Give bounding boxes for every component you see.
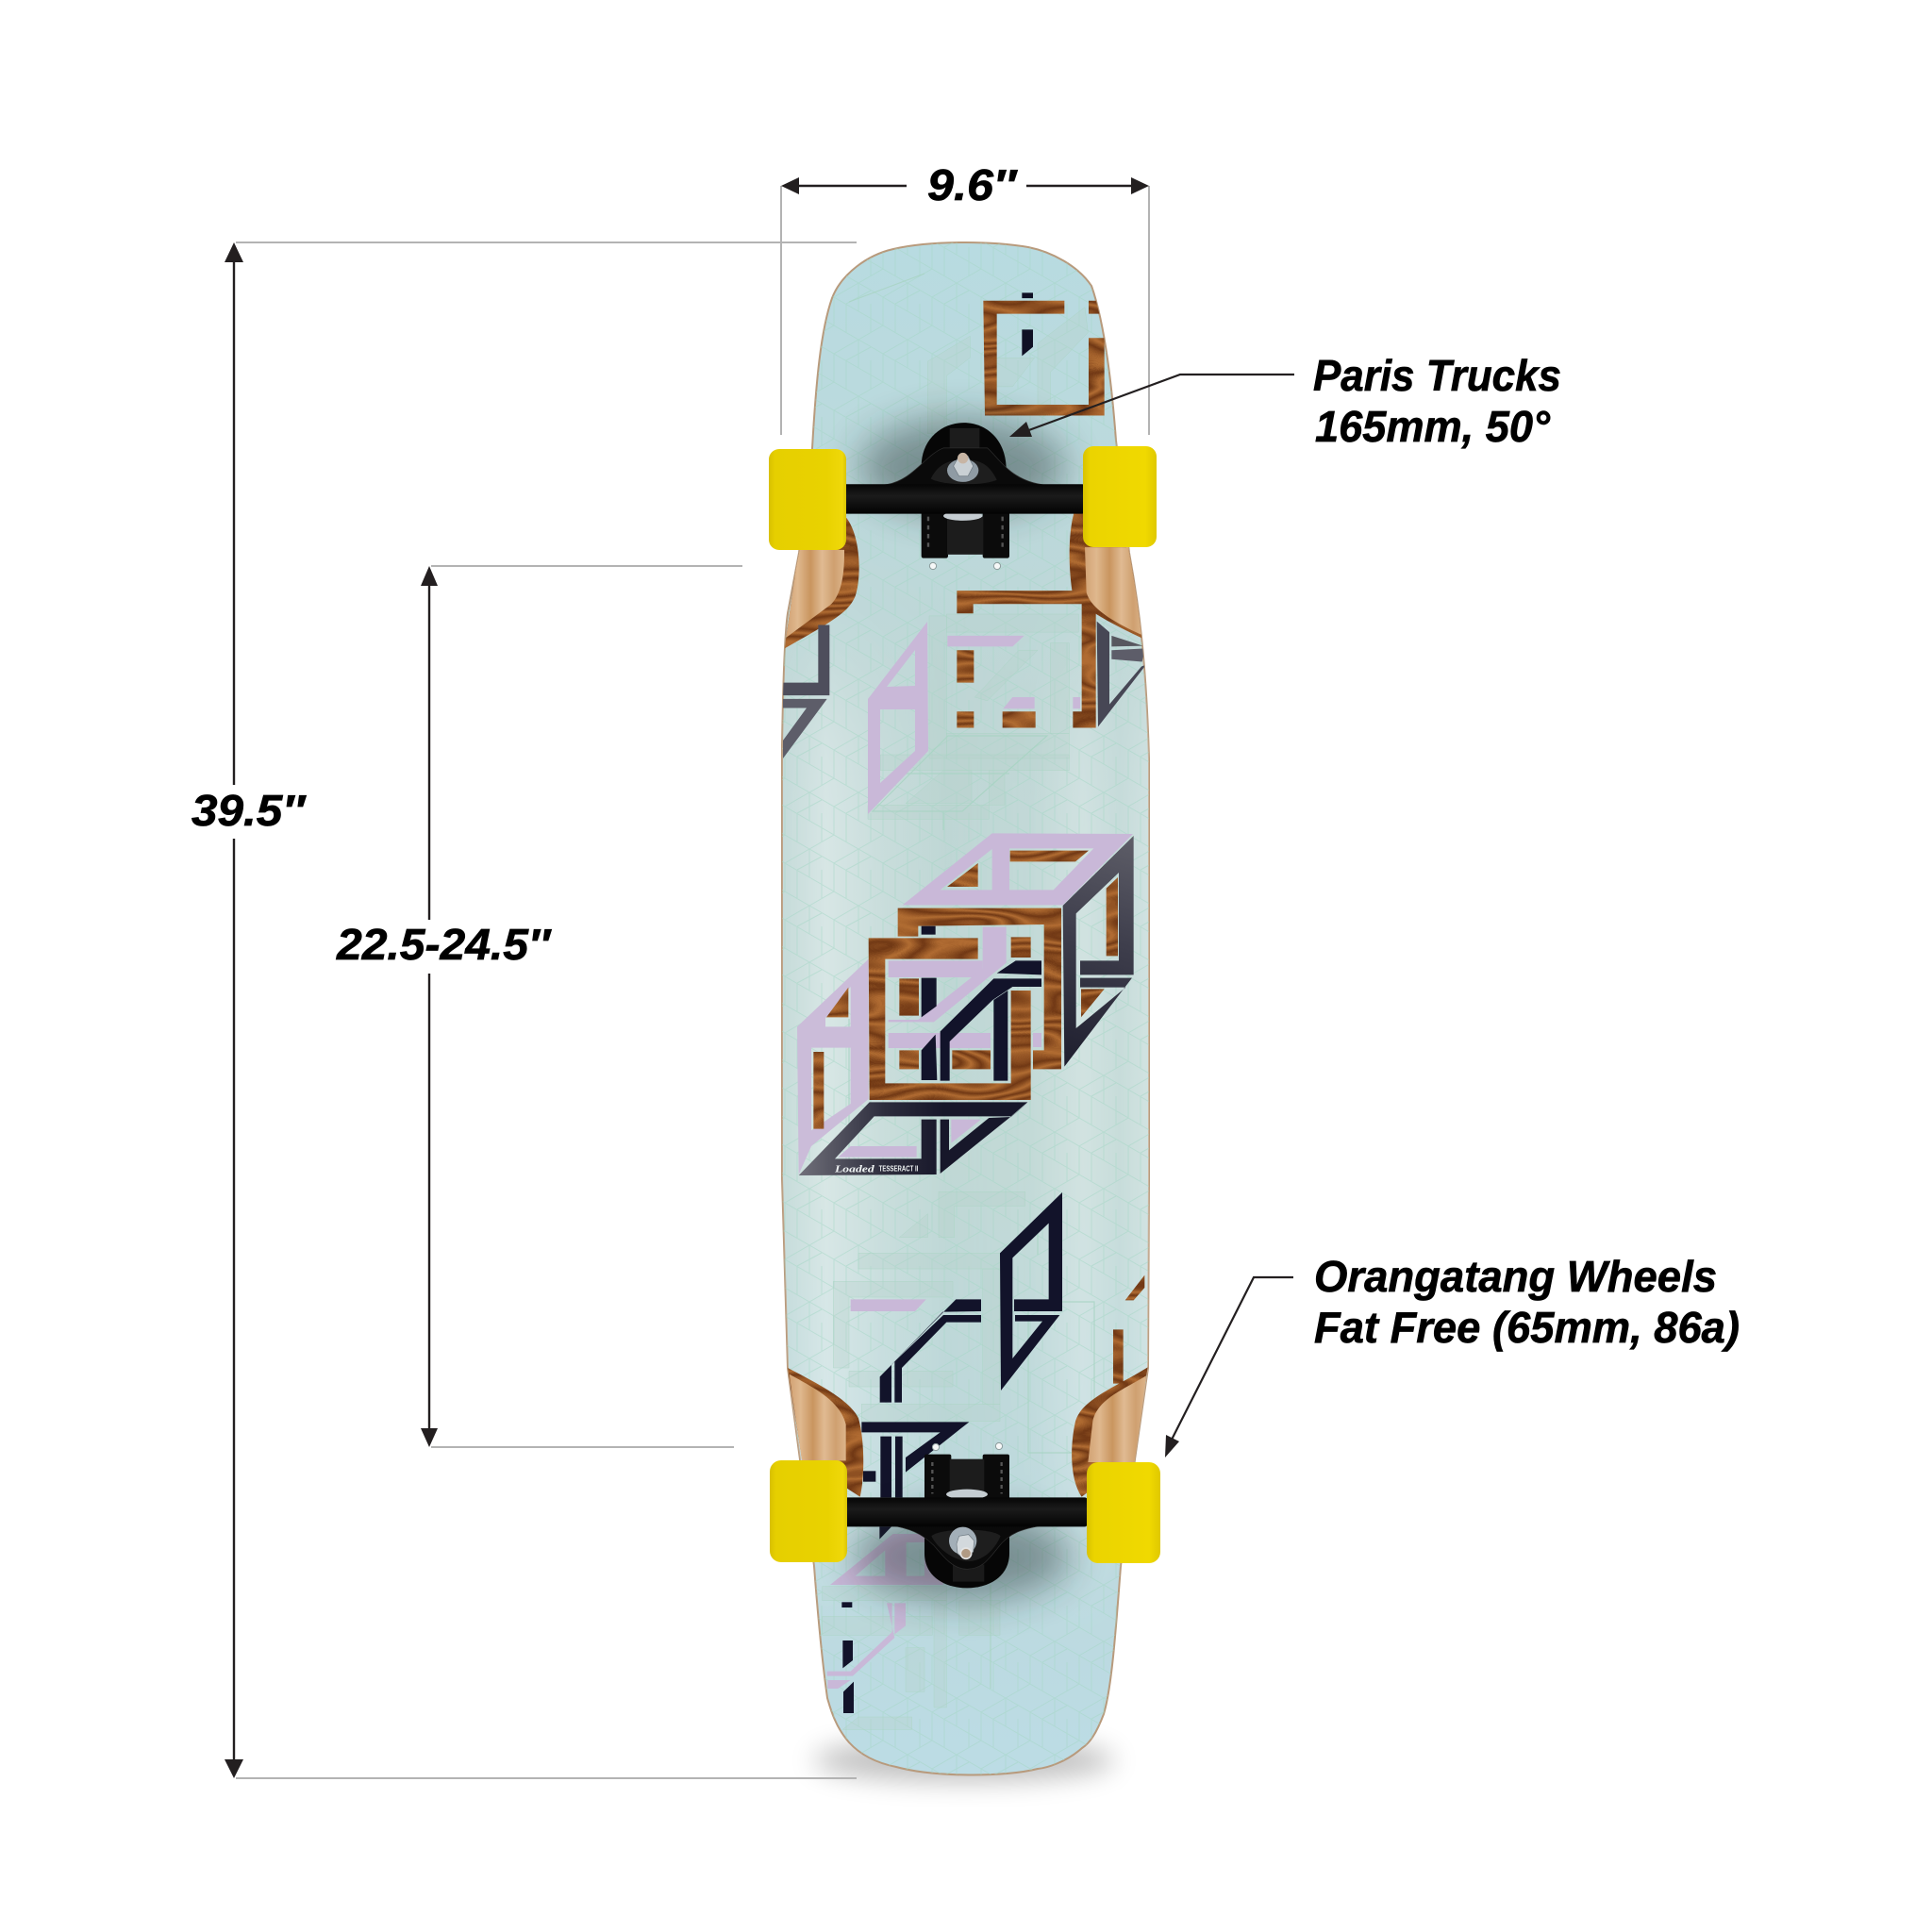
brand mark	[834, 1165, 918, 1172]
left lilac face	[797, 959, 869, 1174]
mounting holes	[929, 562, 1003, 1451]
ground shadow under deck	[813, 1740, 1115, 1781]
truck shadows on deck	[858, 418, 1066, 516]
wheel: bottom left	[770, 1460, 847, 1562]
wood inlay: tail and small pieces	[788, 1275, 1148, 1497]
top truck	[840, 423, 1085, 558]
central cube bars	[799, 836, 1134, 1175]
dimension: width 9.6 inches	[781, 160, 1149, 209]
callout: Orangatang Wheels	[1165, 1252, 1740, 1457]
wheel: bottom right	[1087, 1462, 1160, 1563]
dimension: length 39.5 inches	[192, 242, 307, 1778]
bottom hanger	[890, 1525, 1044, 1569]
deck artwork	[774, 241, 1151, 1778]
bottom baseplate	[924, 1455, 951, 1500]
extension lines	[236, 186, 1149, 1778]
glossy sheen bands	[782, 679, 1149, 1528]
deck edge and top surface	[782, 242, 1149, 1775]
callout: Paris Trucks: Paris Trucks	[1313, 351, 1561, 400]
inner dark bars	[922, 926, 1041, 1081]
bottom dark face	[799, 1102, 1027, 1175]
wood inlay: top graphics	[785, 300, 1141, 728]
bottom kingpin nut	[949, 1527, 976, 1555]
upper lilac cube	[868, 622, 928, 814]
top hanger	[884, 448, 1044, 491]
callout: Paris Trucks: 165mm, 50°	[1315, 402, 1551, 451]
lower dark cube graphic	[851, 1192, 1062, 1403]
skateboard	[769, 241, 1160, 1778]
callout: Orangatang Wheels: Orangatang Wheels	[1314, 1252, 1717, 1301]
wheel: top right	[1083, 446, 1157, 547]
wood inlay: central cube	[813, 851, 1118, 1129]
kingpin nut	[947, 458, 978, 482]
light maple kicktail panels	[786, 547, 1146, 1462]
top axle	[840, 484, 1085, 514]
brand mark: Loaded	[834, 1165, 875, 1175]
top nose lilac and dark graphics	[783, 292, 1146, 758]
ghost tone-on-tone bands	[823, 308, 1088, 1729]
wheel: top left	[769, 449, 846, 550]
isometric line pattern	[778, 241, 1151, 1778]
bottom axle	[842, 1497, 1088, 1526]
central tesseract cube	[797, 833, 1133, 1174]
callout: Paris Trucks	[1009, 351, 1561, 451]
dimension: wheelbase 22.5-24.5 inches	[336, 566, 552, 1447]
ghost line shapes	[849, 274, 1094, 1689]
right dark face	[1063, 836, 1134, 1067]
dimension: length 39.5 inches: 39.5″	[192, 786, 307, 835]
top baseplate	[922, 423, 1007, 484]
bottom truck	[842, 1455, 1088, 1588]
back cube top face	[903, 833, 1133, 905]
dimension: width 9.6 inches: 9.6″	[927, 160, 1018, 209]
dimension: wheelbase 22.5-24.5 inches: 22.5-24.5″	[336, 920, 552, 969]
callout: Orangatang Wheels: Fat Free (65mm, 86a)	[1314, 1303, 1740, 1352]
brand mark: TESSERACT II	[879, 1165, 918, 1174]
bottom tail graphics	[827, 1422, 969, 1713]
